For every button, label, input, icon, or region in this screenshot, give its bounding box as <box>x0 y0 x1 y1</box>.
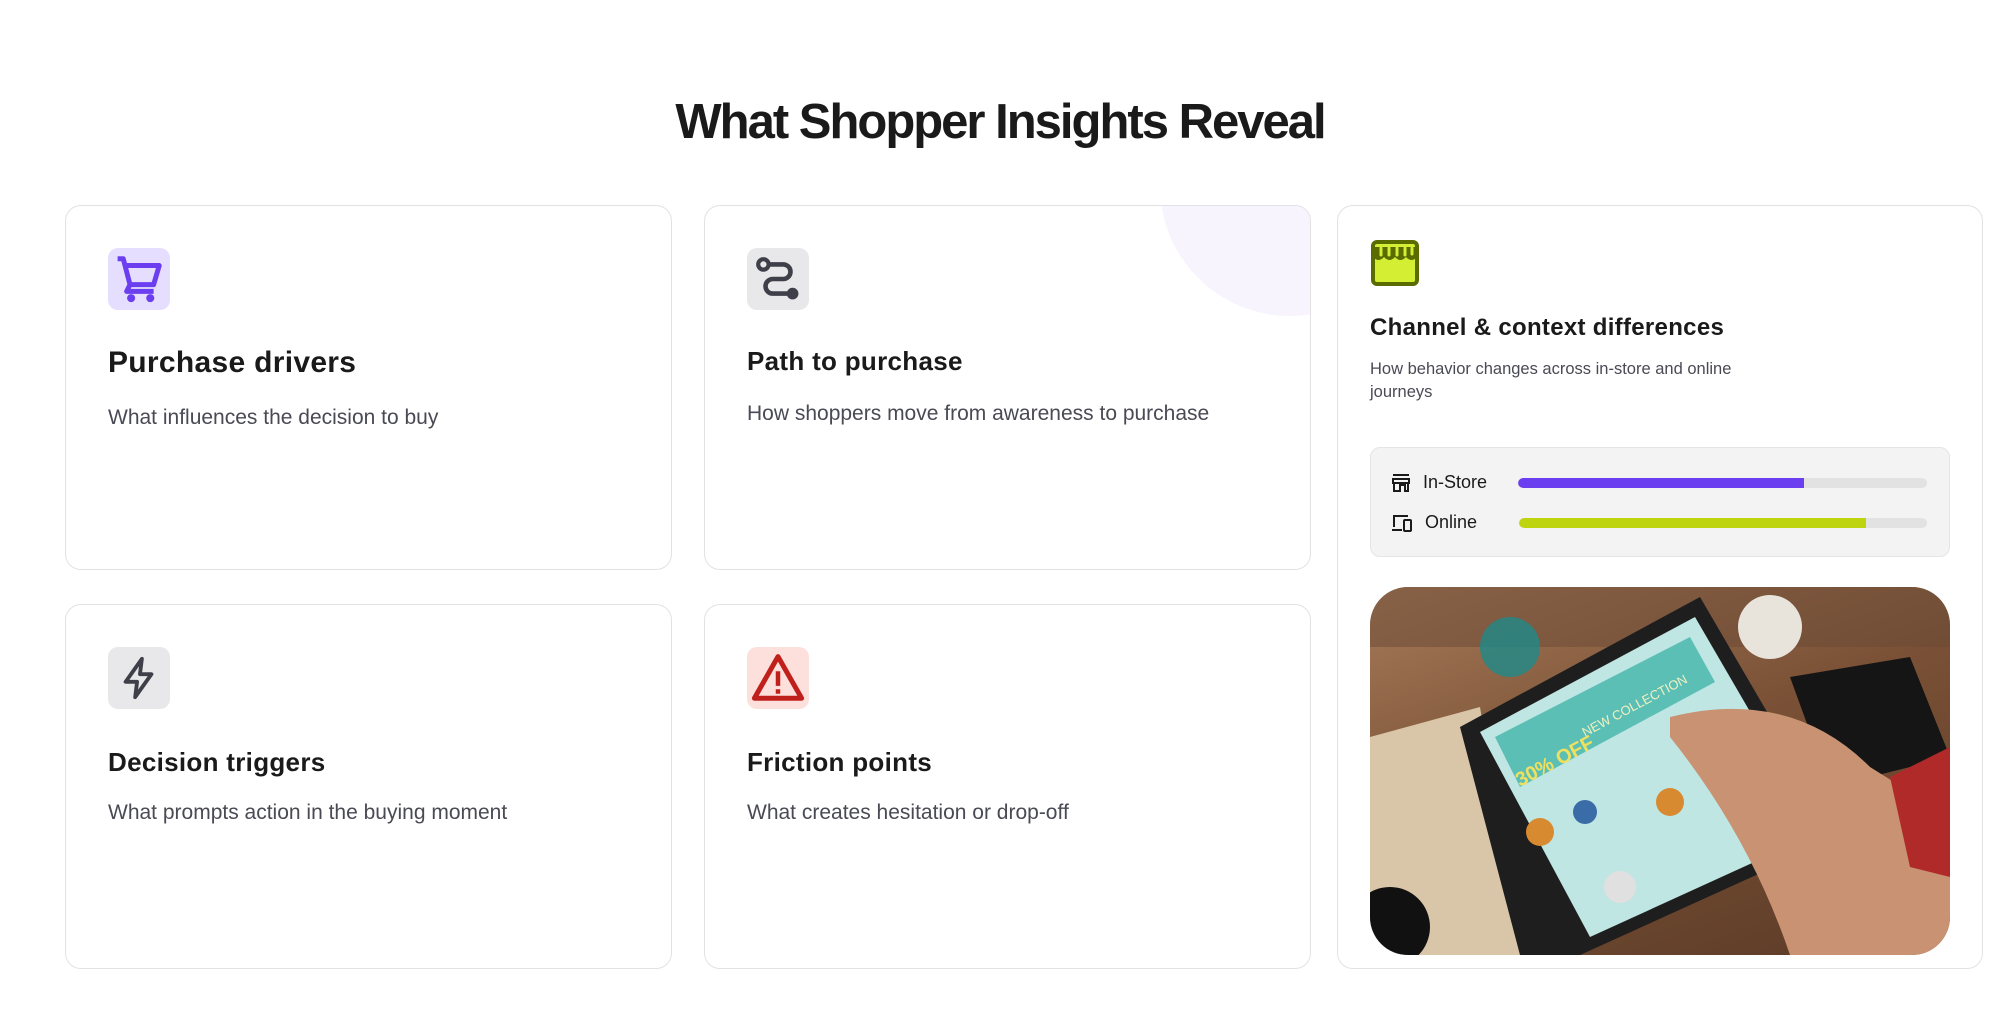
panel: friction points <box>704 604 1311 969</box>
heading: Path to purchase <box>747 346 963 376</box>
row: online <box>1392 512 1927 532</box>
icon: warning <box>747 647 809 709</box>
icon: path <box>747 248 809 310</box>
icon: store <box>1371 240 1419 286</box>
heading: Friction points <box>747 747 932 777</box>
row: online: Online <box>1425 512 1477 532</box>
photo: tablet shopping: NEW COLLECTION <box>1579 671 1690 740</box>
row: in-store: In-Store <box>1423 472 1487 492</box>
decorative circle <box>1160 56 1420 316</box>
icon: cart <box>108 248 170 310</box>
panel: decision triggers <box>65 604 672 969</box>
heading: Decision triggers <box>108 747 326 777</box>
panel: purchase drivers <box>65 205 672 570</box>
description: What prompts action in the buying moment <box>108 801 507 824</box>
photo: tablet shopping: 30% OFF <box>1512 732 1598 791</box>
heading: Channel & context differences <box>1370 314 1724 341</box>
title: What Shopper Insights Reveal <box>675 95 1325 149</box>
icon: lightning <box>108 647 170 709</box>
row: in-store <box>1392 472 1927 492</box>
panel: path to purchase <box>704 205 1311 570</box>
description: What creates hesitation or drop-off <box>747 801 1069 824</box>
heading: Purchase drivers <box>108 346 356 379</box>
panel: channel & context differences <box>1337 205 1983 969</box>
bar chart <box>1370 447 1950 557</box>
photo: tablet shopping <box>1370 587 1950 955</box>
description: How behavior changes across in-store and online journeys <box>1370 360 1731 401</box>
description: How shoppers move from awareness to purchase <box>747 402 1209 425</box>
description: What influences the decision to buy <box>108 406 438 429</box>
